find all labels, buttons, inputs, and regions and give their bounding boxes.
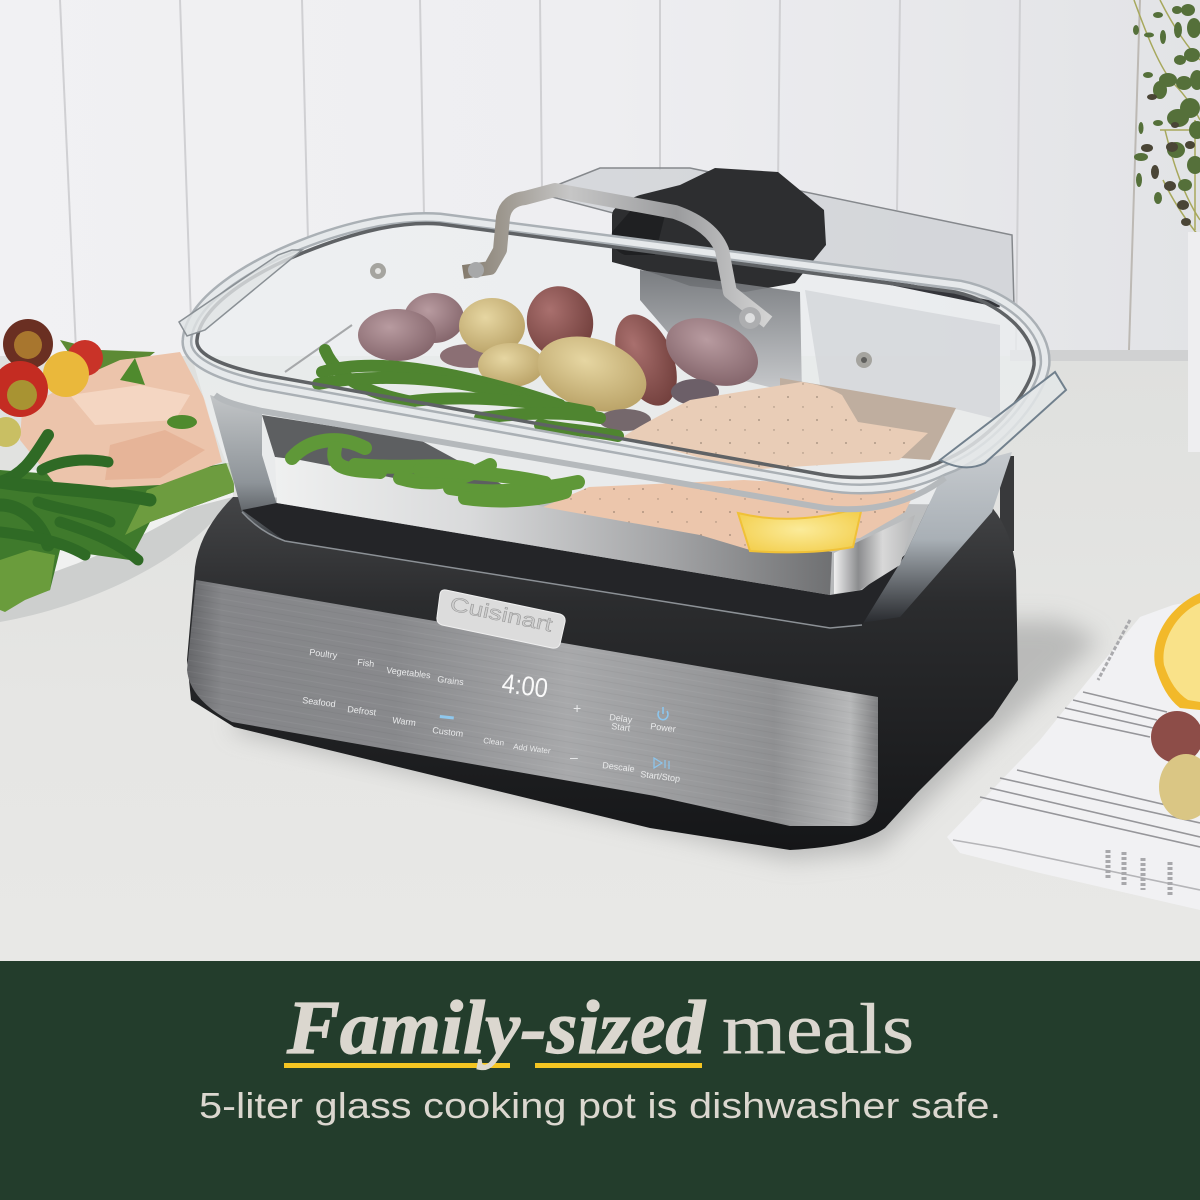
glass lid ring (187, 217, 1045, 489)
chrome side reflection (834, 515, 915, 594)
control labels: Start (611, 721, 631, 733)
power icon (658, 707, 668, 720)
control labels: + (573, 700, 581, 716)
custom indicator (440, 715, 454, 719)
heading underlines (284, 1063, 702, 1068)
cooker shadow (230, 620, 1100, 860)
dark glass base (242, 503, 905, 628)
tray back wall (780, 378, 956, 460)
glass right side wall (840, 452, 1012, 626)
right handle (940, 372, 1066, 467)
pot interior (187, 217, 1045, 628)
cooker base (187, 456, 1018, 850)
left handle (179, 250, 302, 336)
rear housing (1000, 456, 1014, 551)
control labels: Descale (602, 760, 635, 774)
herb plant (1133, 0, 1200, 235)
tray left edge (285, 325, 352, 372)
control labels: Defrost (347, 704, 377, 718)
control labels: Fish (357, 657, 375, 669)
heading (286, 986, 914, 1070)
timer display: 4:00 (500, 668, 550, 704)
backsplash edge (1010, 350, 1200, 361)
control labels: Clean (483, 736, 505, 748)
glass outer wall (242, 512, 862, 628)
subheading: 5-liter glass cooking pot is dishwasher safe. (199, 1085, 1001, 1126)
lemon wedge (738, 507, 862, 552)
control labels (302, 647, 681, 784)
control labels: Seafood (302, 695, 336, 709)
lid vent screw right (856, 352, 872, 368)
control labels: Custom (432, 725, 464, 739)
glass left side wall (210, 395, 360, 541)
steel lid handle (463, 190, 768, 329)
reservoir seen through glass (640, 270, 802, 395)
background: wall panels (0, 0, 1200, 356)
food: potatoes (358, 279, 768, 431)
plate of food (0, 319, 234, 622)
dark interior behind tray (262, 415, 540, 505)
lid vent screw left (370, 263, 386, 279)
banner background (0, 961, 1200, 1200)
control labels: Delay (609, 712, 633, 725)
control labels: Power (650, 721, 676, 734)
food: salmon upper (623, 382, 928, 470)
dark back rim (805, 265, 1000, 305)
interior back right (805, 290, 1000, 420)
back reservoir (537, 168, 1014, 306)
white vase (1188, 232, 1200, 452)
control labels: Poultry (309, 647, 338, 660)
control labels: Start/Stop (640, 769, 681, 784)
steel tray front (275, 457, 832, 595)
food: green beans (292, 350, 618, 500)
control labels: Warm (392, 715, 416, 728)
food: salmon lower (543, 480, 916, 550)
lid knob (612, 168, 826, 292)
control labels: Add Water (513, 742, 551, 756)
towel with lemon and potatoes (947, 593, 1200, 910)
brushed texture (187, 580, 878, 826)
steel front panel (187, 580, 878, 826)
glass pot (179, 168, 1066, 628)
control labels: Vegetables (386, 665, 432, 680)
play pause icon (654, 758, 669, 769)
control labels: – (570, 749, 578, 765)
countertop (0, 356, 1200, 962)
lid ring highlight (187, 217, 1045, 489)
lid ring metal band (197, 224, 1034, 477)
heading: meals (722, 989, 914, 1069)
control labels: Grains (437, 674, 465, 687)
black housing (187, 497, 1018, 850)
front lower rim (215, 395, 945, 509)
brand badge: Cuisinart (448, 593, 555, 637)
brand badge (437, 590, 565, 648)
heading: Family-sized (286, 986, 706, 1070)
